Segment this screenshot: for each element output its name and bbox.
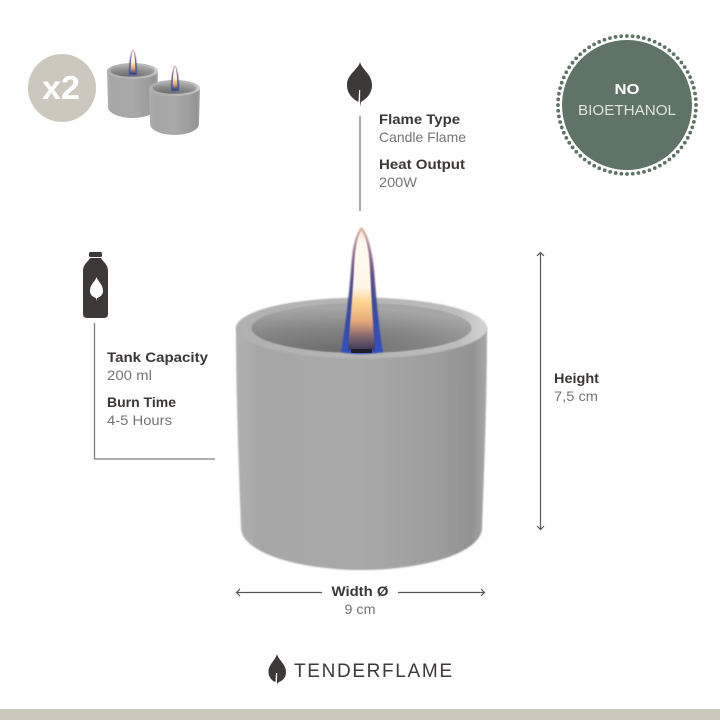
- text: tank capacity and burn time: Burn Time: [107, 394, 176, 410]
- logo: tenderflame: [268, 654, 452, 684]
- logo: tenderflame: TENDERFLAME: [294, 661, 452, 682]
- candle body: [236, 327, 487, 570]
- product: large grey candle holder: [236, 227, 487, 570]
- candle rim: [236, 298, 487, 358]
- text: tank capacity and burn time: 200 ml: [107, 367, 152, 383]
- text: flame type and heat output: [379, 111, 466, 190]
- text: height: 7,5 cm: [554, 388, 598, 404]
- flame type leader line: [359, 116, 361, 211]
- text: flame type and heat output: Heat Output: [379, 156, 465, 172]
- badge: no bioethanol: NO: [614, 82, 640, 98]
- text: tank capacity and burn time: [107, 349, 208, 428]
- text: flame type and heat output: 200W: [379, 174, 418, 190]
- text: width: [332, 583, 389, 617]
- quantity badge: x2: x2: [42, 69, 80, 106]
- text: flame type and heat output: Candle Flame: [379, 129, 466, 145]
- tank leader line: [94, 323, 215, 459]
- badge: no bioethanol: BIOETHANOL: [578, 102, 676, 119]
- text: tank capacity and burn time: Tank Capacity: [107, 349, 208, 365]
- flame core: [348, 230, 375, 350]
- badge: no bioethanol: [558, 36, 696, 174]
- footer band: [0, 709, 720, 720]
- text: height: [554, 370, 599, 404]
- icon: two small candles: [107, 49, 200, 135]
- flame outer blue: [341, 227, 383, 354]
- text: height: Height: [554, 370, 599, 386]
- text: tank capacity and burn time: 4-5 Hours: [107, 412, 172, 428]
- text: width: 9 cm: [344, 601, 376, 617]
- icon: bottle: [83, 252, 108, 318]
- text: flame type and heat output: Flame Type: [379, 111, 460, 127]
- text: width: Width Ø: [332, 583, 389, 599]
- height dimension arrow: [537, 252, 544, 530]
- quantity badge: x2: [28, 54, 96, 122]
- icon: flame: [347, 62, 372, 107]
- wick: [351, 349, 372, 353]
- candle opening: [252, 303, 472, 353]
- width dimension arrow: [236, 589, 484, 596]
